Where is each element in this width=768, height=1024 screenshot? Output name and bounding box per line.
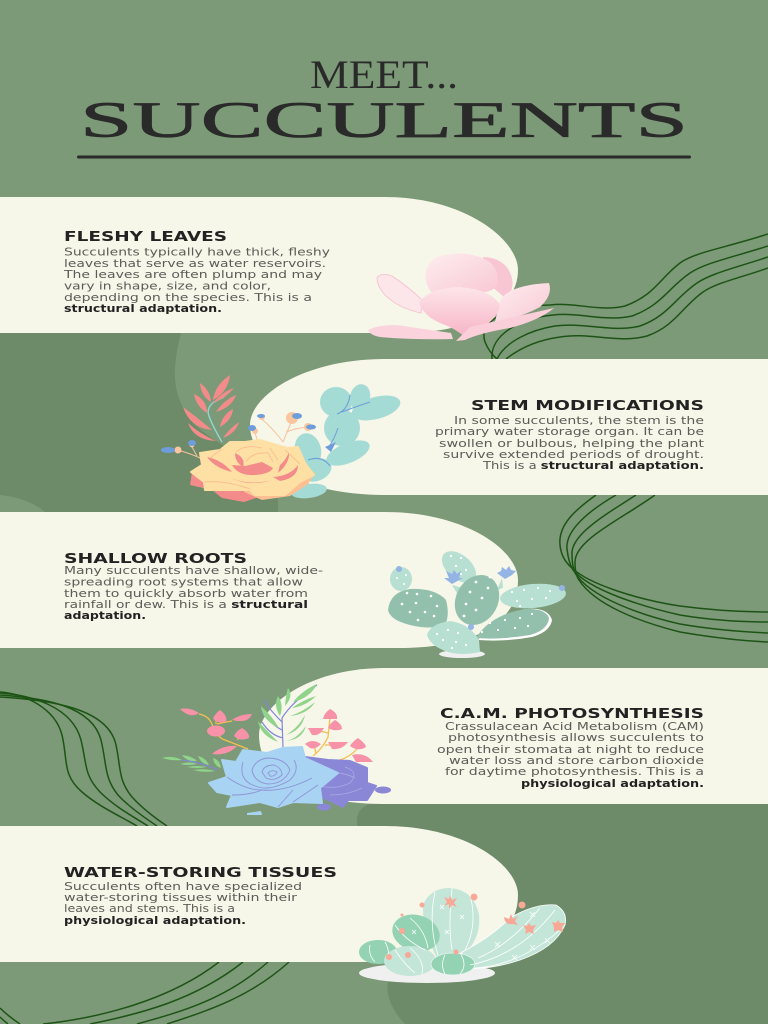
body text: depending on the species. This is a [64,292,312,304]
title rule [77,156,691,158]
body text: leaves and stems. This is a [64,903,235,915]
body text [64,881,302,927]
wavy lines: top right [484,234,768,359]
icon: peach succulent with leaves [161,375,403,502]
icon: barrel cactus group [359,888,566,983]
wavy lines: bottom [0,962,289,1024]
body text [64,565,323,622]
panel: water storing tissues [0,826,566,983]
body text: adaptation. [64,610,146,622]
body text: photosynthesis allows succulents to [448,732,704,744]
body text: leaves that serve as water reservoirs. [64,258,326,270]
body text: open their stomata at night to reduce [437,744,704,756]
heading: SHALLOW ROOTS [64,551,247,567]
body text: spreading root systems that allow [64,576,303,588]
body text: The leaves are often plump and may [63,269,322,281]
body text: In some succulents, the stem is the [454,415,704,427]
body text: for daytime photosynthesis. This is a [445,766,704,778]
body text: physiological adaptation. [521,778,704,790]
wavy lines: middle right [560,495,768,642]
icon: prickly pear cactus [388,545,567,658]
body text: them to quickly absorb water from [64,588,308,600]
heading: FLESHY LEAVES [64,229,227,245]
body text [63,246,330,315]
body text: vary in shape, size, and color, [64,280,271,292]
body text: Many succulents have shallow, wide- [64,565,323,577]
body text: Succulents often have specialized [64,881,302,893]
body text [435,415,704,472]
body text: rainfall or dew. This is a structural [64,599,308,611]
heading: C.A.M. PHOTOSYNTHESIS [440,706,704,722]
wavy lines: left [0,692,167,826]
background blob: lower right dark [357,804,768,1024]
body text: Succulents typically have thick, fleshy [64,246,330,258]
body text: water loss and store carbon dioxide [449,755,704,767]
body text: Crassulacean Acid Metabolism (CAM) [445,721,704,733]
body text: swollen or bulbous, helping the plant [439,438,704,450]
panel: cam photosynthesis [162,668,768,815]
panel: fleshy leaves [0,197,554,341]
body text [437,721,704,790]
heading: STEM MODIFICATIONS [471,398,704,414]
icon: pink magnolia [368,254,554,341]
body text: structural adaptation. [64,303,222,315]
body text: This is a structural adaptation. [482,460,704,472]
panel: stem modifications [161,359,768,502]
body text: survive extended periods of drought. [443,449,704,461]
title [77,52,691,158]
background blob: left dark [0,333,278,512]
body text: water-storing tissues within their [64,892,298,904]
icon: blue and purple succulents [162,684,391,815]
body text: physiological adaptation. [64,915,246,927]
panel: shallow roots [0,512,567,658]
title line: succulents: SUCCULENTS [80,93,688,149]
body text: primary water storage organ. It can be [435,426,704,438]
title line: meet: MEET... [310,52,458,97]
heading: WATER-STORING TISSUES [64,865,337,881]
background blob: small light corner [0,495,45,512]
